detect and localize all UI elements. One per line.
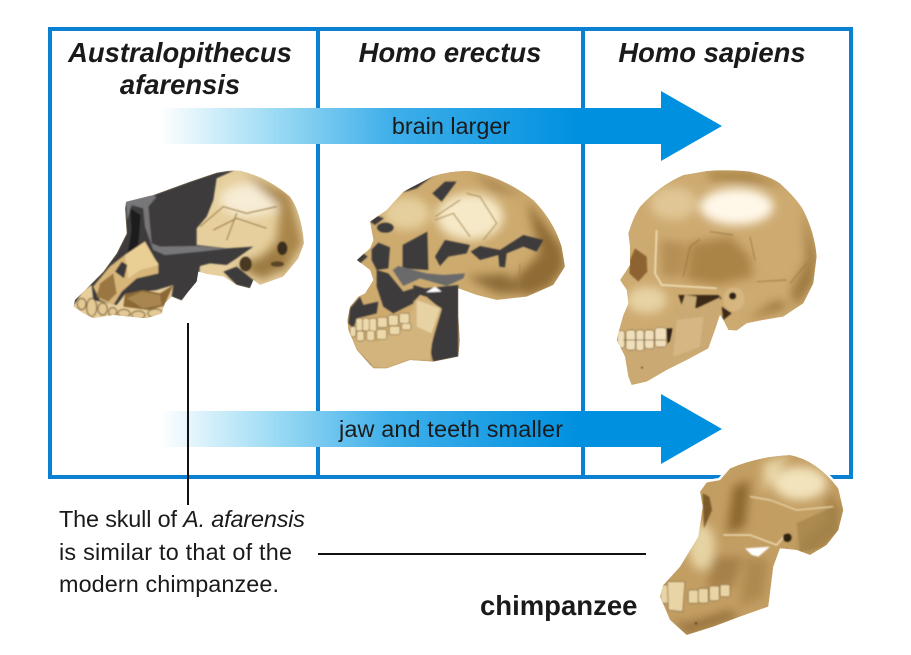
label: chimpanzee: chimpanzee <box>480 590 637 621</box>
skull: chimpanzee <box>660 455 843 635</box>
arrow: jaw and teeth smaller: jaw and teeth smaller <box>338 416 563 442</box>
heading: Homo sapiens: Homo sapiens <box>618 37 806 68</box>
heading: Australopithecus afarensis: Australopithecus <box>68 37 292 68</box>
leader line from A. afarensis skull <box>187 323 189 505</box>
arrow: jaw and teeth smaller <box>160 394 722 464</box>
skull: Homo erectus <box>347 171 565 370</box>
caption text <box>59 506 305 597</box>
skull: Australopithecus afarensis <box>73 170 304 320</box>
arrow: brain larger <box>160 91 722 161</box>
leader line to chimpanzee <box>318 553 646 555</box>
heading: Australopithecus afarensis: afarensis <box>120 69 240 100</box>
skull: Homo sapiens <box>617 170 817 385</box>
caption text: is similar to that of the <box>59 539 292 565</box>
panel frame with three columns <box>50 29 851 477</box>
caption text: modern chimpanzee. <box>59 571 279 597</box>
caption text: The skull of A. afarensis <box>59 506 305 532</box>
heading: Homo erectus: Homo erectus <box>359 37 541 68</box>
arrow: brain larger: brain larger <box>392 113 510 139</box>
